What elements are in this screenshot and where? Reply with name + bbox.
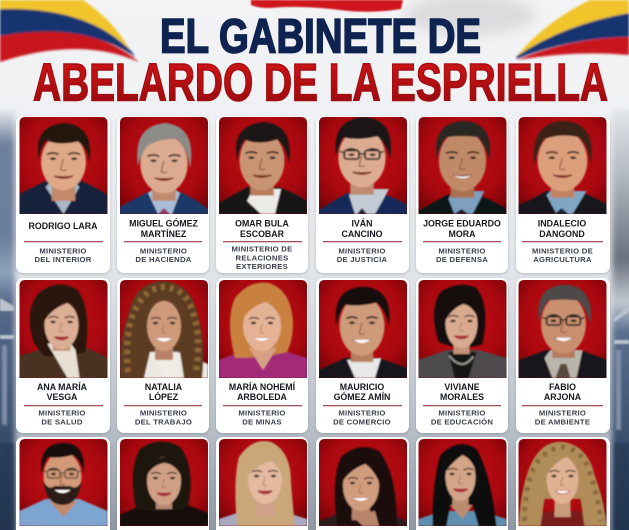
card: bottom row minister 5 bbox=[416, 437, 508, 530]
name: ESCOBAR bbox=[240, 229, 285, 239]
name: VIVIANE bbox=[444, 382, 480, 392]
portrait: Ana María Vesga bbox=[20, 280, 108, 378]
ministry: DE MINAS bbox=[242, 418, 282, 427]
name: DANGOND bbox=[539, 229, 585, 239]
name: GÓMEZ AMÍN bbox=[334, 391, 390, 402]
ministry: MINISTERIO bbox=[238, 409, 286, 418]
card: bottom row minister 3 bbox=[216, 437, 308, 530]
portrait: Omar Bula Escobar bbox=[219, 117, 307, 214]
name: ARBOLEDA bbox=[237, 392, 288, 402]
name: MARÍA NOHEMÍ bbox=[229, 382, 295, 392]
name: FABIO bbox=[549, 382, 576, 392]
portrait: Indalecio Dangond bbox=[518, 117, 608, 214]
name: OMAR BULA bbox=[235, 218, 289, 228]
portrait: Fabio Arjona bbox=[518, 280, 608, 378]
ministry: MINISTERIO bbox=[38, 409, 86, 418]
card: Ana María Vesga bbox=[16, 278, 110, 433]
card: bottom row minister 2 bbox=[117, 437, 209, 530]
portrait: Jorge Eduardo Mora bbox=[418, 117, 506, 214]
name: LÓPEZ bbox=[149, 391, 179, 402]
portrait: woman with blonde hair bbox=[219, 439, 307, 526]
name: MARTÍNEZ bbox=[141, 229, 187, 239]
portrait: Rodrigo Lara bbox=[20, 117, 108, 214]
card: bottom row minister 6 bbox=[516, 437, 610, 530]
card: bottom row minister 1 bbox=[16, 437, 110, 530]
card: Mauricio Gómez Amín bbox=[316, 278, 409, 433]
ministry: MINISTERIO bbox=[438, 246, 486, 256]
portrait: man with beard and glasses bbox=[20, 439, 108, 526]
portrait: Iván Cancino bbox=[319, 117, 407, 214]
ministry: EXTERIORES bbox=[236, 262, 288, 271]
card: Miguel Gómez Martínez bbox=[117, 116, 209, 273]
name: JORGE EDUARDO bbox=[423, 218, 501, 228]
name: RODRIGO LARA bbox=[29, 221, 98, 231]
card: Jorge Eduardo Mora bbox=[416, 116, 508, 273]
card: Iván Cancino bbox=[316, 116, 409, 273]
title bbox=[33, 10, 608, 112]
ministry: AGRICULTURA bbox=[533, 255, 592, 264]
name: MORA bbox=[449, 229, 476, 239]
ministry: DE SALUD bbox=[41, 418, 83, 427]
name: ANA MARÍA bbox=[37, 382, 87, 392]
portrait: woman with curly blond hair bbox=[518, 439, 608, 526]
ministry: DE COMERCIO bbox=[333, 418, 391, 427]
card: bottom row minister 4 bbox=[316, 437, 409, 530]
name: CANCINO bbox=[341, 229, 383, 239]
ministry: DEL TRABAJO bbox=[135, 418, 192, 427]
flag: red banner top center bbox=[251, 0, 403, 12]
ministry: DE EDUCACIÓN bbox=[431, 418, 493, 427]
ministry: MINISTERIO bbox=[539, 409, 586, 418]
ministry: DE JUSTICIA bbox=[337, 255, 387, 264]
flag: right colombian ribbon bbox=[516, 0, 629, 60]
name: MAURICIO bbox=[340, 382, 384, 392]
ministry: MINISTERIO DE bbox=[532, 246, 593, 256]
portrait: María Nohemí Arboleda bbox=[219, 280, 307, 378]
title line: el gabinete de: EL GABINETE DE bbox=[160, 10, 481, 64]
name: IVÁN bbox=[351, 218, 373, 228]
ministry: MINISTERIO bbox=[338, 246, 386, 256]
flag: left colombian ribbon bbox=[0, 0, 139, 62]
portrait: woman with dark hair smiling bbox=[319, 439, 407, 526]
card: Omar Bula Escobar bbox=[216, 116, 308, 273]
ministry: MINISTERIO bbox=[438, 409, 486, 418]
ministry: DEL INTERIOR bbox=[34, 255, 92, 264]
portrait: Miguel Gómez Martínez bbox=[120, 117, 208, 214]
name: NATALIA bbox=[145, 382, 182, 392]
ministry: MINISTERIO bbox=[140, 409, 187, 418]
name: ARJONA bbox=[544, 392, 582, 402]
ministry: MINISTERIO bbox=[140, 246, 187, 256]
name: MIGUEL GÓMEZ bbox=[129, 218, 198, 228]
ministry: MINISTERIO bbox=[338, 409, 386, 418]
card: María Nohemí Arboleda bbox=[216, 278, 308, 433]
portrait: Mauricio Gómez Amín bbox=[319, 280, 407, 378]
card: Viviane Morales bbox=[416, 278, 508, 433]
ministry: DE AMBIENTE bbox=[535, 418, 590, 427]
name: MORALES bbox=[440, 392, 484, 402]
ministry: DE HACIENDA bbox=[135, 255, 192, 264]
portrait: woman with dark hair bbox=[120, 439, 208, 526]
name: INDALECIO bbox=[538, 218, 586, 228]
portrait: woman with long black hair bbox=[418, 439, 506, 526]
card: Fabio Arjona bbox=[516, 278, 610, 433]
card: Rodrigo Lara bbox=[16, 116, 110, 273]
ministry: RELACIONES bbox=[236, 253, 288, 262]
name: VESGA bbox=[47, 392, 78, 402]
ministry: DE DEFENSA bbox=[436, 255, 488, 264]
portrait: Viviane Morales bbox=[418, 280, 506, 378]
card: Indalecio Dangond bbox=[516, 116, 610, 273]
card: Natalia López bbox=[117, 278, 209, 433]
ministry: MINISTERIO bbox=[39, 246, 87, 256]
ministry: MINISTERIO DE bbox=[232, 245, 292, 254]
portrait: Natalia López bbox=[120, 280, 208, 378]
